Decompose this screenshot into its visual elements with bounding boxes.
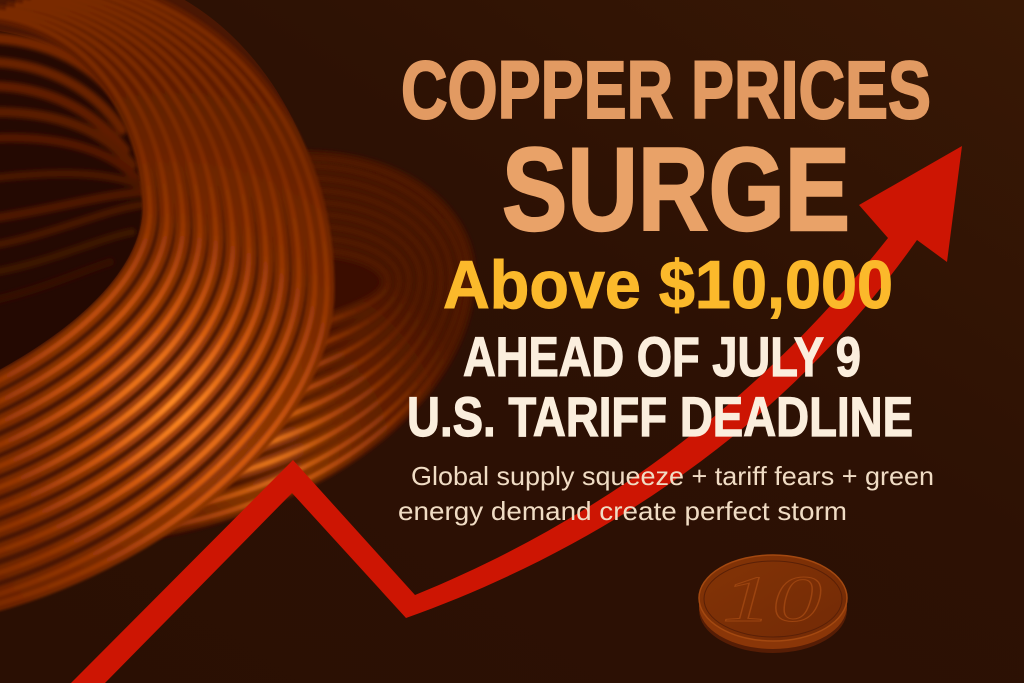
heading: above $10,000: Above $10,000 [443, 247, 893, 323]
subtitle line one: Global supply squeeze + tariff fears + green [411, 461, 934, 491]
icon: copper coin [699, 555, 847, 653]
heading: tariff deadline: U.S. TARIFF DEADLINE [407, 385, 913, 448]
icon: front copper coil [0, 0, 330, 612]
icon: copper coin: 10 [722, 563, 822, 636]
heading: ahead of july 9: AHEAD OF JULY 9 [463, 325, 861, 388]
far wall bands [0, 38, 142, 300]
arrow: rising red trend line [71, 146, 962, 683]
icon: back copper coil [120, 152, 474, 539]
title: surge: SURGE [502, 124, 850, 256]
coil hole [0, 30, 143, 375]
subtitle line two: energy demand create perfect storm [398, 496, 847, 526]
wire strands [0, 0, 327, 606]
